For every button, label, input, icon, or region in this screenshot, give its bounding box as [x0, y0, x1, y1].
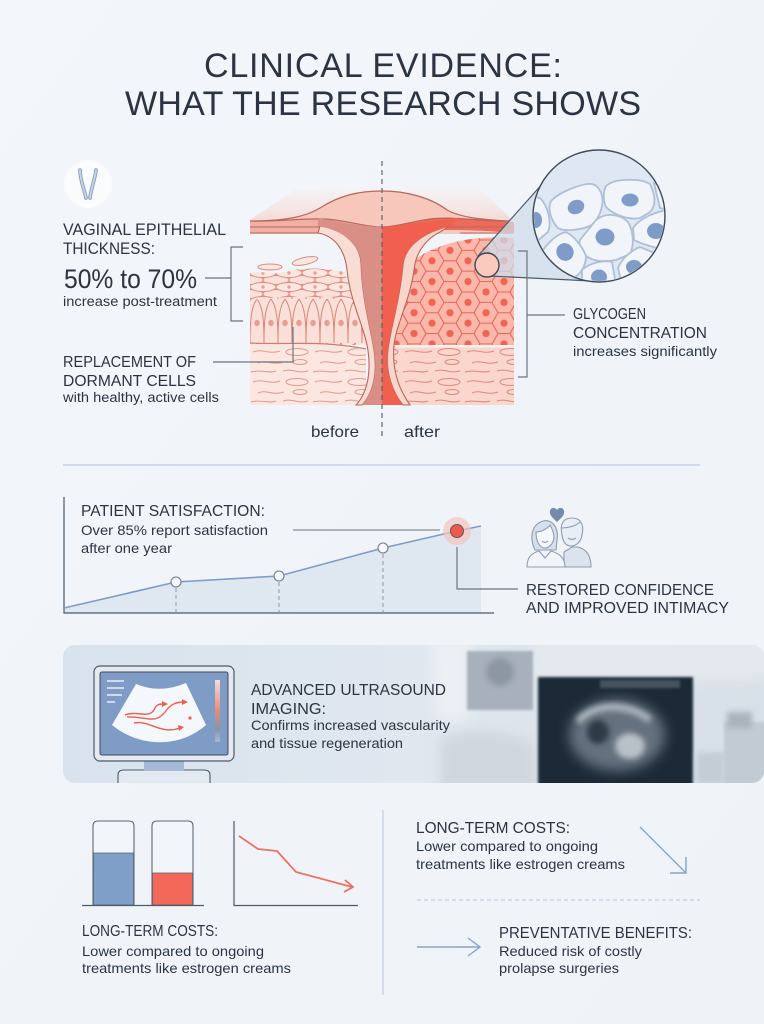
text block: long-term costs right [416, 820, 625, 872]
line chart: declining cost [234, 821, 358, 906]
text block: patient satisfaction: after one year [81, 540, 172, 556]
text block: epithelial thickness: increase post-treatment [63, 294, 217, 309]
text block: glycogen concentration: CONCENTRATION [573, 325, 707, 342]
text block: ultrasound: and tissue regeneration [251, 735, 403, 751]
text block: long-term costs right: Lower compared to ongoing [416, 838, 598, 854]
text block: preventative benefits: Reduced risk of costly [499, 943, 642, 959]
text block: preventative benefits: prolapse surgeries [499, 960, 619, 976]
center dashed divider [381, 161, 383, 440]
icon: vaginal anatomy [64, 160, 112, 208]
text block: epithelial thickness: VAGINAL EPITHELIAL [63, 221, 226, 239]
text block: preventative benefits [499, 925, 692, 976]
text block: preventative benefits: PREVENTATIVE BENEFITS: [499, 925, 692, 942]
text block: glycogen concentration: increases significantly [573, 344, 717, 359]
surface mound [250, 188, 510, 234]
label: before: before [311, 424, 359, 441]
after: canal lining and core [387, 226, 450, 405]
text block: restored confidence: AND IMPROVED INTIMACY [526, 600, 729, 617]
text block: ultrasound: IMAGING: [251, 701, 326, 718]
label: after: after [404, 424, 441, 441]
text block: restored confidence [526, 582, 729, 617]
text block: long-term costs left: treatments like estrogen creams [82, 960, 291, 976]
arrow: downward trend [640, 827, 686, 873]
text block: long-term costs right: LONG-TERM COSTS: [416, 820, 570, 837]
text block: replacement of dormant cells: with healthy, active cells [62, 390, 219, 405]
panel: advanced ultrasound imaging [63, 640, 764, 790]
text block: epithelial thickness [63, 221, 226, 309]
photo: blurred ultrasound room [430, 640, 764, 790]
leader: replacement of dormant cells [213, 327, 293, 362]
tissue cross-section diagram [250, 188, 514, 405]
text block: replacement of dormant cells: DORMANT CELLS [63, 373, 196, 390]
text block: glycogen concentration [573, 306, 717, 359]
icon: couple with heart [527, 508, 591, 567]
magnifier callout: cell detail [475, 150, 668, 285]
before: canal lining and core [318, 226, 375, 405]
text block: ultrasound: ADVANCED ULTRASOUND [251, 682, 446, 699]
text block: patient satisfaction: PATIENT SATISFACTION: [81, 503, 265, 520]
title: WHAT THE RESEARCH SHOWS [125, 85, 641, 123]
text block: ultrasound: Confirms increased vascularity [251, 717, 450, 733]
text block: long-term costs left: Lower compared to ongoing [82, 943, 264, 959]
text block: long-term costs left: LONG-TERM COSTS: [82, 923, 218, 940]
text block: patient satisfaction [81, 503, 268, 556]
text block: long-term costs right: treatments like estrogen creams [416, 856, 625, 872]
text block: replacement of dormant cells [62, 354, 219, 405]
before: tissue layers [250, 255, 368, 405]
text block: long-term costs left [82, 923, 291, 976]
surface bands [250, 216, 382, 233]
text block: patient satisfaction: Over 85% report satisfaction [81, 522, 268, 538]
bracket: thickness [205, 247, 243, 321]
text block: ultrasound [251, 682, 450, 751]
title [125, 47, 641, 123]
text block: replacement of dormant cells: REPLACEMENT OF [63, 354, 196, 371]
icon: ultrasound monitor [94, 666, 234, 783]
text block: epithelial thickness: THICKNESS: [63, 240, 155, 258]
text block: epithelial thickness: 50% to 70% [64, 264, 197, 294]
bracket: glycogen [518, 251, 565, 377]
arrow: preventative [417, 938, 480, 956]
text block: restored confidence: RESTORED CONFIDENCE [526, 582, 714, 599]
bar chart: cost comparison [82, 821, 204, 906]
after: tissue layers [392, 237, 514, 405]
title: CLINICAL EVIDENCE: [204, 47, 562, 85]
text block: glycogen concentration: GLYCOGEN [573, 306, 646, 323]
line chart: patient satisfaction [64, 497, 518, 613]
